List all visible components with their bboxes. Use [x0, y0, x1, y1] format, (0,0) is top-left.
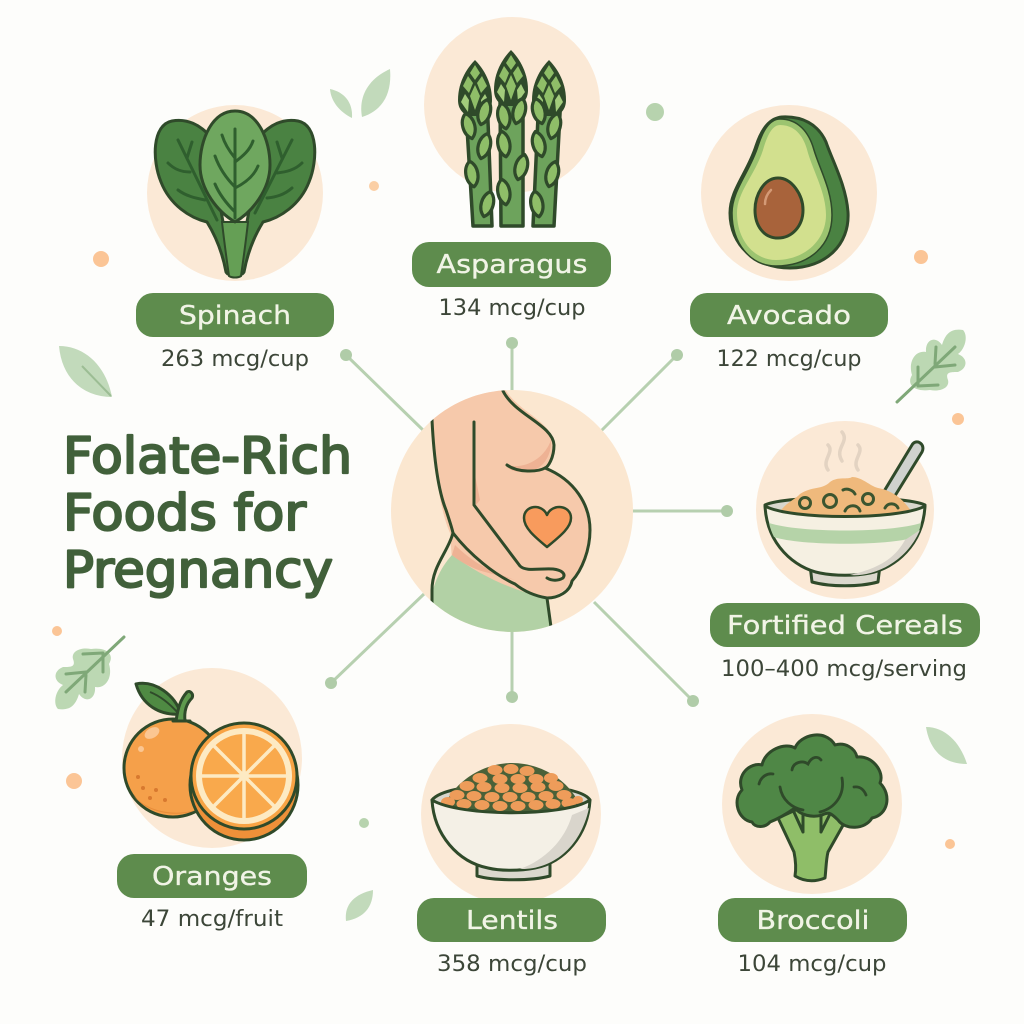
center: pregnant belly	[391, 385, 633, 640]
panel: avocado	[701, 105, 877, 281]
panel: spinach	[147, 105, 323, 281]
label: broccoli	[718, 898, 907, 977]
decorative leaves	[59, 69, 967, 921]
icon: oranges	[124, 683, 298, 840]
body outline	[432, 420, 453, 603]
oak leaf sprig: left	[55, 637, 124, 709]
connector lines	[325, 337, 733, 707]
title	[63, 427, 352, 599]
label: asparagus: 134 mcg/cup	[438, 296, 586, 321]
left spear	[465, 95, 492, 226]
heart	[524, 507, 571, 547]
label: spinach: 263 mcg/cup	[161, 347, 309, 372]
label: broccoli: 104 mcg/cup	[738, 952, 886, 977]
icon: avocado half	[730, 117, 848, 268]
label: lentils	[417, 898, 606, 977]
label: lentils: Lentils	[466, 906, 558, 936]
decorative dots	[52, 103, 964, 849]
title: Pregnancy	[63, 541, 333, 599]
icon: asparagus spears	[458, 50, 566, 226]
label: spinach	[136, 293, 334, 372]
title: Foods for	[63, 484, 306, 542]
panel: asparagus	[424, 17, 600, 226]
label: oranges: Oranges	[152, 862, 272, 892]
title: Folate-Rich	[63, 427, 352, 485]
label: fortified cereals: Fortified Cereals	[727, 611, 963, 641]
panel: fortified cereals	[756, 421, 934, 599]
skirt	[431, 555, 550, 632]
icon: lentil bowl	[432, 763, 590, 880]
leaf veins	[82, 366, 111, 396]
label: avocado: Avocado	[727, 301, 851, 331]
body skin	[432, 385, 590, 598]
label: fortified cereals	[710, 603, 980, 682]
label: oranges: 47 mcg/fruit	[141, 907, 283, 932]
label: asparagus	[412, 242, 611, 321]
label: oranges	[117, 854, 307, 932]
label: asparagus: Asparagus	[436, 250, 588, 280]
label: broccoli: Broccoli	[756, 906, 870, 936]
label: spinach: Spinach	[179, 301, 291, 331]
label: fortified cereals: 100–400 mcg/serving	[721, 657, 967, 682]
panel: lentils	[421, 724, 601, 904]
label: lentils: 358 mcg/cup	[437, 952, 587, 977]
label: avocado: 122 mcg/cup	[716, 347, 862, 372]
icon: spinach leaves	[155, 111, 315, 278]
oak leaf sprig: right	[897, 330, 966, 402]
label: avocado	[690, 293, 888, 372]
icon: broccoli	[737, 735, 887, 881]
panel: broccoli	[722, 714, 902, 894]
middle spear	[500, 95, 523, 226]
right spear	[533, 95, 561, 226]
icon: cereal bowl	[765, 432, 925, 586]
panel: oranges	[122, 668, 302, 848]
